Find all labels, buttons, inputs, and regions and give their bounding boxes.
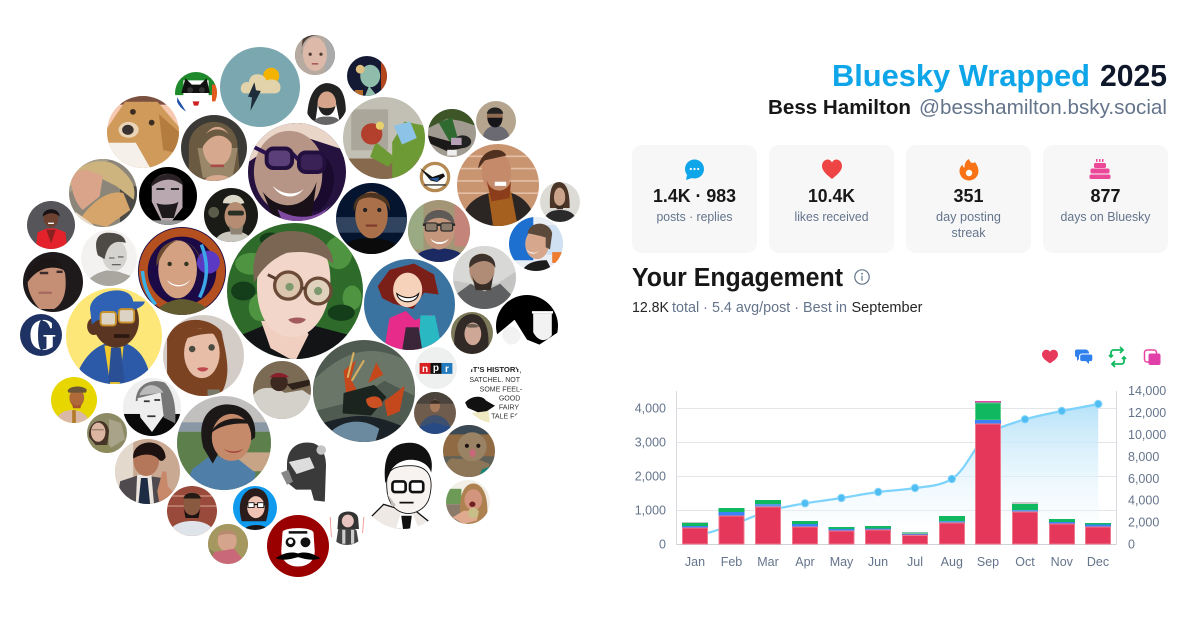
bar: Nov	[1049, 519, 1075, 544]
avatar: person lying on rocks	[428, 109, 476, 157]
bar: Mar	[755, 500, 781, 544]
month labels: May	[830, 555, 854, 569]
avatar: NPR logo: p	[433, 363, 439, 374]
avatar: NPR logo: r	[445, 364, 449, 375]
stat card: likes received: 10.4K	[808, 185, 856, 206]
avatar: woman with long red hair	[163, 315, 244, 396]
avatar: Kermit sipping tea	[343, 97, 425, 179]
bar: Sep	[975, 401, 1001, 544]
engagement summary: 12.8K	[632, 300, 669, 316]
bar: Aug	[939, 516, 965, 544]
avatar: woman in denim jacket with landscape	[177, 396, 271, 490]
icon: replies	[1075, 349, 1092, 364]
icon: flame	[960, 159, 978, 180]
month labels: Nov	[1051, 555, 1074, 569]
right axis labels: 14,000	[1128, 384, 1166, 398]
avatar: comic panel with handwriting	[463, 359, 527, 423]
right axis labels: 2,000	[1128, 516, 1159, 530]
icon: chat bubble	[685, 160, 704, 180]
avatar: comic panel with handwriting: SOME FEEL-	[480, 387, 523, 394]
avatar: black and white woman	[123, 378, 181, 436]
avatar: woman with dark curly hair	[23, 252, 83, 312]
avatar: bearded man, muted tones	[453, 246, 516, 309]
avatar: man against brick wall	[167, 486, 217, 536]
avatar: woman with blonde hair	[181, 115, 247, 181]
engagement summary: September	[852, 300, 923, 316]
right axis labels: 8,000	[1128, 450, 1159, 464]
stat card: days on Bluesky: days on Bluesky	[1060, 209, 1151, 224]
avatar: black and white comic characters	[496, 295, 558, 357]
avatar: woman eating	[446, 480, 490, 524]
left axis labels	[635, 402, 666, 552]
stat card: day posting streak	[906, 145, 1031, 253]
user name and handle	[768, 96, 1167, 119]
month labels: Jan	[685, 555, 705, 569]
avatar: shaggy dog	[443, 425, 495, 477]
bar: Feb	[718, 508, 744, 544]
left axis labels: 3,000	[635, 436, 666, 450]
avatar: anime girl with flower	[347, 56, 387, 96]
user name and handle: @besshamilton.bsky.social	[919, 96, 1167, 119]
gridlines and axes	[676, 391, 1116, 544]
avatar: cartoon man in UVA cap	[66, 288, 162, 384]
bar: Apr	[792, 521, 818, 544]
right axis labels: 6,000	[1128, 472, 1159, 486]
left axis labels: 1,000	[635, 504, 666, 518]
icon: likes	[1042, 350, 1058, 363]
stat card: days on Bluesky	[1043, 145, 1168, 253]
avatar: man with city skyline at night	[336, 183, 407, 254]
cumulative area and line	[695, 400, 1102, 544]
icon: info	[855, 270, 869, 284]
right axis labels: 10,000	[1128, 428, 1166, 442]
month labels: Jul	[907, 555, 923, 569]
engagement chart	[635, 384, 1166, 569]
avatar: bitmoji woman on blue	[233, 486, 277, 530]
stat card: day posting streak: streak	[952, 225, 986, 240]
right axis labels: 4,000	[1128, 494, 1159, 508]
stacked bars	[682, 401, 1111, 544]
avatar: black and white man	[139, 167, 197, 225]
engagement summary: total · 5.4 avg/post · Best in	[672, 300, 847, 316]
left axis labels: 2,000	[635, 470, 666, 484]
month labels: Mar	[757, 555, 779, 569]
avatar: Japanese dragon print	[313, 340, 415, 442]
avatar: woman with grey hair	[451, 312, 493, 354]
stat card: posts and replies: 1.4K · 983	[653, 185, 736, 206]
avatar: Guardian G logo	[20, 314, 62, 356]
bar: Oct	[1012, 502, 1038, 544]
avatar: comic panel with handwriting: GOOD	[499, 396, 520, 403]
avatar: red-bearded man against brick	[457, 144, 539, 226]
bar: Jul	[902, 532, 928, 544]
avatar: man in mask	[476, 101, 516, 141]
avatar: comic panel with handwriting: IT'S HISTORY,	[471, 365, 522, 374]
avatar: comic panel with handwriting: SATCHEL. NOT	[469, 377, 521, 384]
avatar: baby	[208, 524, 248, 564]
avatar: girl portrait	[295, 35, 335, 75]
avatar: magpie logo	[420, 162, 450, 192]
avatar: bearded cartoon man	[307, 83, 346, 125]
avatar: small anime figure	[327, 505, 367, 545]
avatar: bearded man on yellow	[51, 377, 97, 423]
stat card: likes received: likes received	[794, 209, 868, 224]
avatar: cartoon cat	[175, 72, 217, 112]
avatar: smiling man with glasses	[408, 200, 470, 262]
title: 2025	[1100, 58, 1167, 93]
month labels: Aug	[941, 555, 963, 569]
icon: reposts	[1109, 347, 1126, 367]
engagement summary	[632, 300, 923, 316]
avatar: Bess Hamilton main portrait	[227, 223, 363, 359]
user name and handle: Bess Hamilton	[768, 96, 911, 119]
stat card: day posting streak: 351	[954, 185, 984, 206]
icon: heart	[822, 160, 842, 179]
avatar: man in red cap relaxing	[253, 361, 311, 419]
avatar: smiling man in profile	[509, 217, 563, 271]
avatar: man with glasses, purple tint	[248, 123, 346, 221]
avatar: weather icon	[220, 47, 300, 127]
avatar: man in front of plasma globe	[138, 227, 226, 315]
avatar: woman with glasses and mossy background	[87, 413, 127, 453]
icon: quotes	[1144, 350, 1160, 365]
month labels: Apr	[795, 555, 815, 569]
bar: Jan	[682, 522, 708, 544]
title: Bluesky Wrapped	[832, 58, 1090, 93]
right axis labels: 12,000	[1128, 406, 1166, 420]
stat card: posts and replies: posts · replies	[656, 209, 733, 224]
month labels: Oct	[1015, 555, 1035, 569]
icon: birthday cake	[1090, 159, 1110, 179]
stat card: posts and replies	[632, 145, 757, 253]
avatar: comic panel with handwriting: FAIRY	[499, 405, 519, 412]
avatar: Natty Boh mascot	[267, 515, 329, 577]
month labels: Dec	[1087, 555, 1109, 569]
bar: May	[828, 527, 854, 544]
right axis labels: 0	[1128, 538, 1135, 552]
stat card: likes received	[769, 145, 894, 253]
avatar: woman in red blazer	[27, 201, 75, 249]
bar: Dec	[1085, 523, 1111, 544]
month labels	[685, 555, 1109, 569]
right axis labels	[1128, 384, 1166, 552]
avatar: grey ink figure in goggles	[278, 438, 338, 510]
avatar: long-haired man	[540, 182, 580, 222]
avatar: NPR logo	[415, 347, 457, 389]
chart legend	[1042, 347, 1160, 367]
left axis labels: 0	[659, 538, 666, 552]
avatar: pencil sketch woman	[81, 230, 137, 286]
stat card: days on Bluesky: 877	[1090, 185, 1120, 206]
avatar bubble cloud	[20, 35, 580, 577]
heading: Your Engagement: Your Engagement	[632, 264, 843, 292]
month labels: Feb	[721, 555, 742, 569]
avatar: man sitting cross-legged	[414, 392, 456, 434]
stat card: day posting streak: day posting	[936, 209, 1001, 224]
avatar: man with cap and sunglasses	[204, 188, 258, 242]
avatar: golden dog	[107, 96, 179, 168]
avatar: NPR logo: n	[422, 364, 428, 375]
avatar: blonde woman with orange cat	[69, 159, 137, 227]
month labels: Sep	[977, 555, 999, 569]
avatar: man pointing finger	[115, 439, 180, 504]
month labels: Jun	[868, 555, 888, 569]
avatar: ink drawing of man with glasses	[359, 441, 447, 529]
left axis labels: 4,000	[635, 402, 666, 416]
avatar: comic panel with handwriting: TALE FOR	[491, 414, 525, 421]
avatar: cartoon woman laughing	[364, 259, 455, 350]
bar: Jun	[865, 526, 891, 544]
